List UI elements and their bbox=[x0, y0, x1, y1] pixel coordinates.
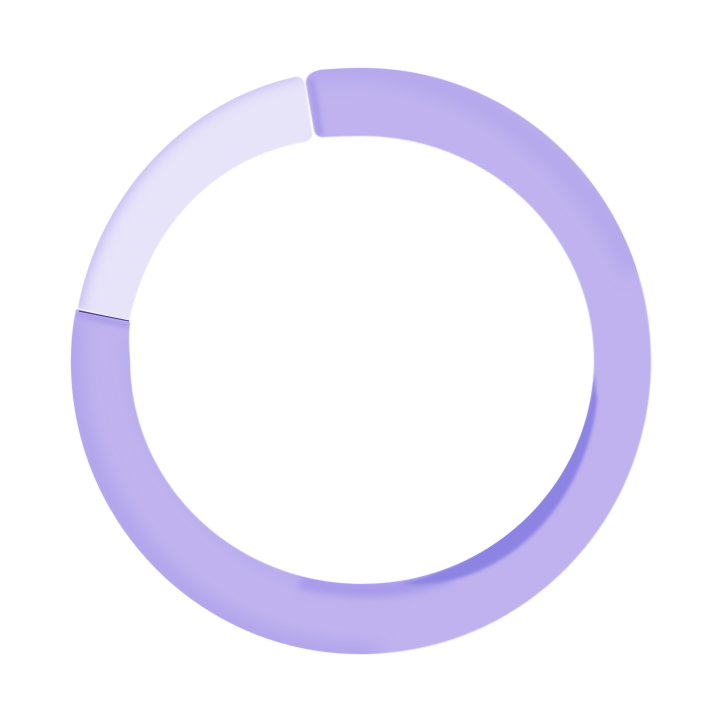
segment: pale lilac arc bbox=[72, 68, 312, 321]
shading: darker outer rim left and bottom bbox=[71, 320, 380, 656]
shading: outer rim of pale arc bbox=[72, 68, 300, 310]
shading: lower inner edge bbox=[300, 575, 450, 589]
shading: inner crescent shadow bbox=[400, 372, 597, 584]
segment: large purple arc bbox=[71, 68, 651, 656]
segment divider line bbox=[79, 311, 129, 321]
shading: darker outer rim top right bbox=[310, 69, 635, 270]
shading: inner darker edge bottom left bbox=[128, 340, 302, 577]
shading: segment end faces bbox=[76, 314, 130, 326]
donut chart bbox=[70, 68, 652, 654]
